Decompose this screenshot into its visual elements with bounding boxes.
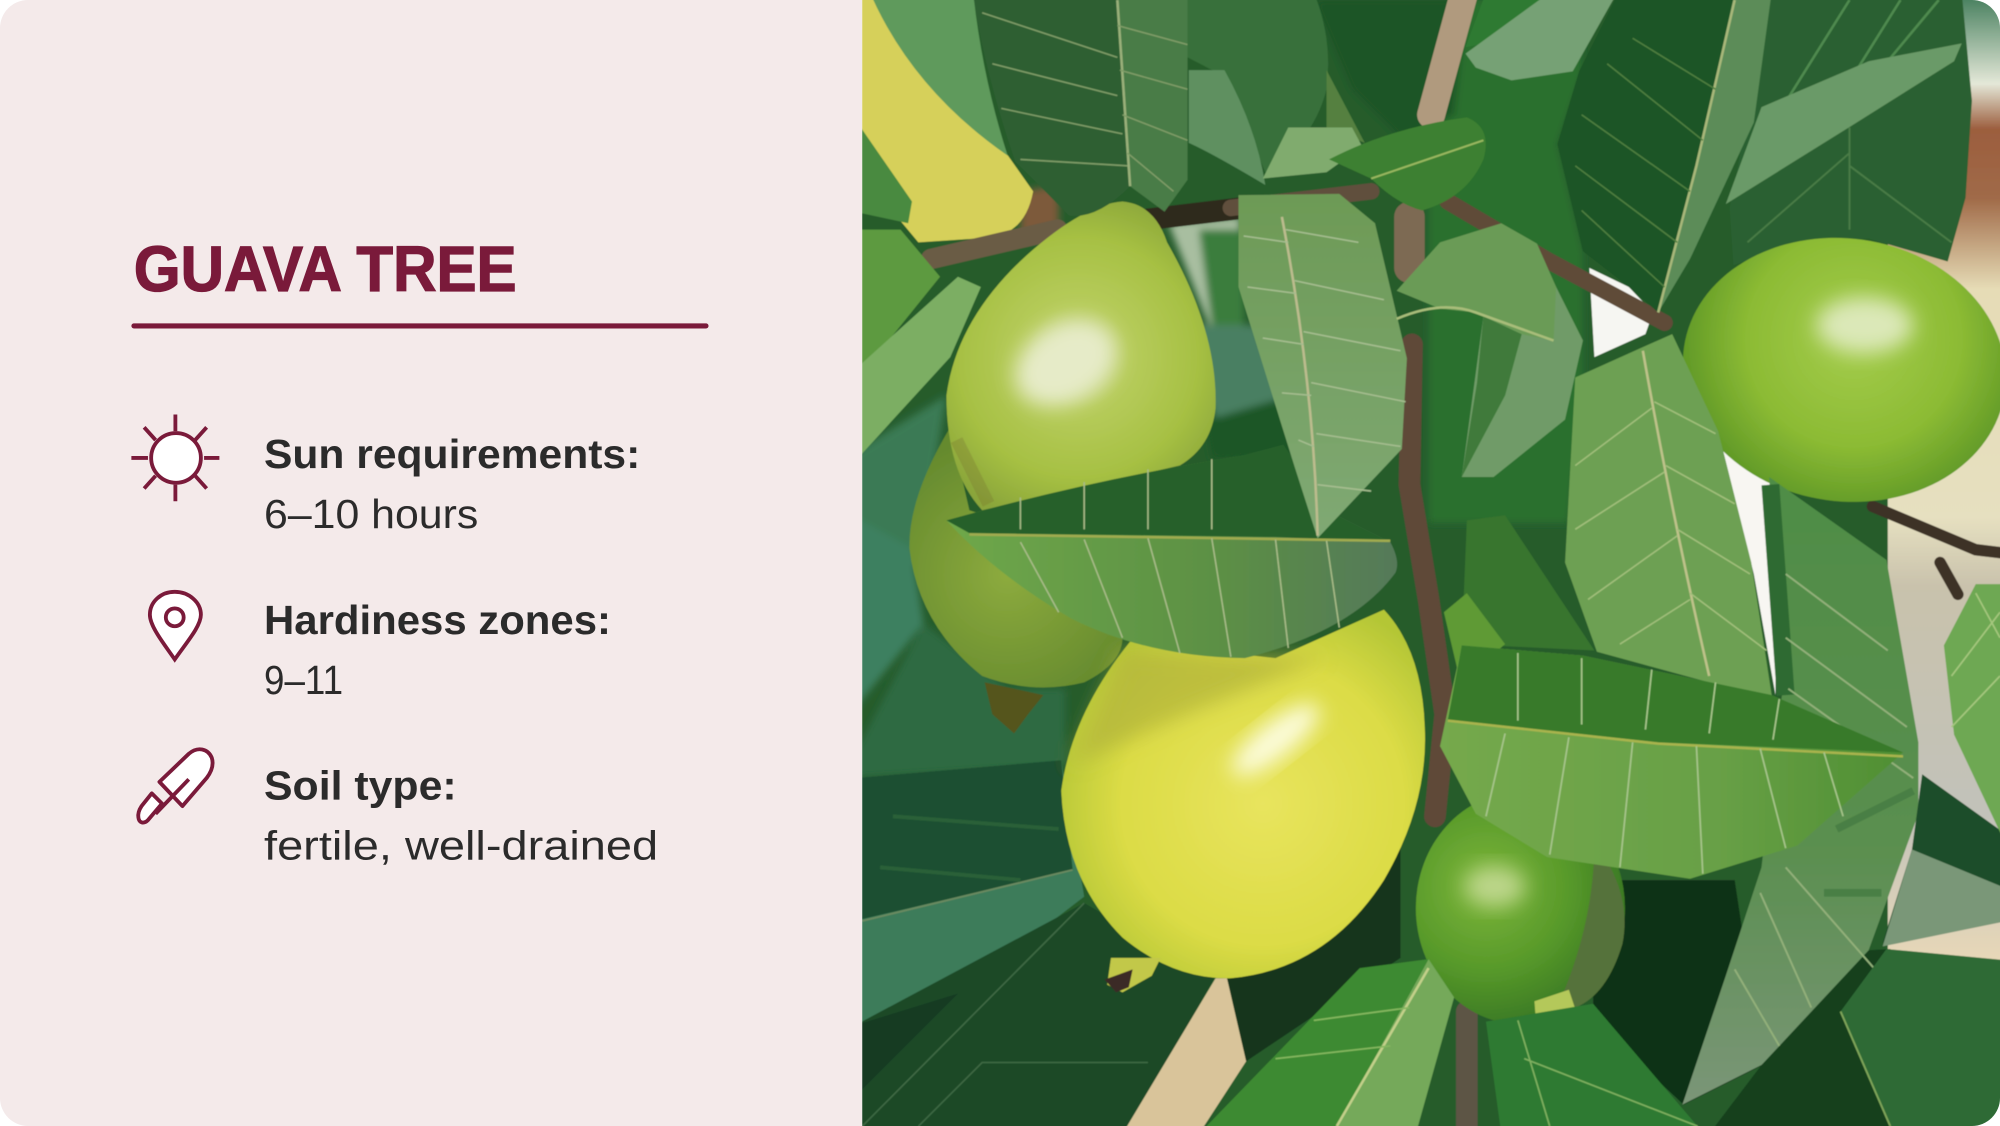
leaf: long light green centre [1239, 194, 1407, 538]
title: GUAVA TREE [134, 233, 517, 305]
leaf: horizontal centre [946, 445, 1397, 658]
leaf: top centre [1188, 0, 1365, 185]
text: hardiness zones: 9–11 [264, 657, 343, 703]
text: hardiness zones: Hardiness zones: [264, 597, 611, 643]
leaf: lower right dark shadow [1709, 949, 1890, 1126]
photo: guava branch with fruit and leaves [842, 0, 2000, 1126]
leaf: top left light [870, 0, 1008, 156]
leaves: upper left [862, 128, 982, 454]
background: blurred back foliage [842, 0, 1583, 778]
text: sun requirements: Sun requirements: [264, 431, 640, 477]
leaf: large front horizontal [1440, 645, 1903, 879]
leaf: right tall [1682, 477, 1918, 1105]
panel: info background [0, 0, 862, 1126]
leaf: right upper dark back [1730, 0, 1972, 265]
leaves: centre right curled [1397, 223, 1583, 477]
leaf: upright green right of centre [1565, 334, 1772, 695]
icon: sun [131, 415, 219, 501]
leaf: small curled top [1329, 117, 1486, 210]
leaf: bottom centre [1199, 959, 1454, 1126]
leaf: top right small [1466, 0, 1617, 80]
fruit: yellow guava top left [855, 0, 1033, 242]
branches [931, 0, 2000, 1126]
leaf: upper right light [1726, 43, 1962, 204]
text: hardiness zones [266, 604, 607, 694]
fruit: pear-shaped guava [946, 202, 1216, 510]
leaf: far right edge [1944, 584, 2000, 848]
leaf: bottom right of stem [1486, 1004, 1704, 1126]
text: sun requirements [265, 438, 636, 528]
fruit: green guava behind [909, 427, 1122, 733]
text: sun requirements: 6–10 hours [264, 491, 478, 537]
title underline [134, 324, 706, 328]
leaves: lower right [1841, 774, 2000, 1126]
text: soil type: fertile, well-drained [264, 823, 658, 869]
icon: location pin [150, 592, 201, 659]
leaf: upper dark [1557, 0, 1772, 312]
fruit: small green guava [1415, 806, 1626, 1020]
fruit: lime green guava right [1682, 237, 2000, 502]
text: soil type: Soil type: [264, 763, 457, 809]
background: tan gap [1122, 978, 1246, 1126]
text: soil type [264, 770, 656, 865]
icon: trowel [138, 749, 213, 823]
leaf: top large [973, 0, 1188, 216]
fruit: large yellow guava [1061, 610, 1425, 992]
leaf: left background leaves [855, 760, 1214, 1126]
leaf: below centre dark [1444, 515, 1594, 682]
